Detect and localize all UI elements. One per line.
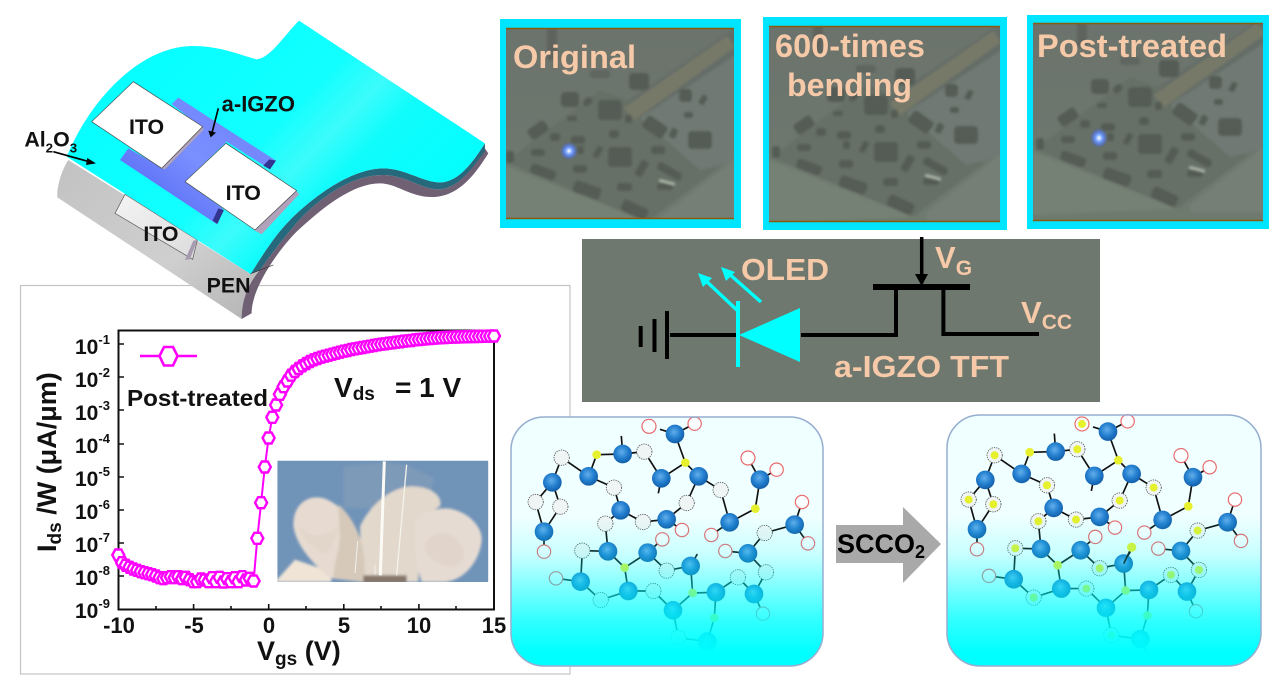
- y axis tick labels: -4: [98, 431, 111, 446]
- photo panel: original: [496, 19, 745, 228]
- circuit labels: V: [935, 240, 956, 275]
- device labels: ITO: [226, 181, 261, 205]
- process arrow: SCCO2: 2: [915, 542, 925, 562]
- photo panel: post-treated: [1026, 15, 1275, 229]
- y axis tick labels: -9: [98, 596, 110, 611]
- y axis title: I: [32, 544, 62, 552]
- x axis title: (V): [297, 636, 341, 666]
- y axis tick labels: 10: [75, 468, 98, 491]
- y axis tick labels: -2: [98, 365, 110, 380]
- panel: transfer curve chart: [20, 286, 570, 674]
- label: Post-treated: [1037, 28, 1227, 64]
- x axis title: V: [257, 636, 275, 666]
- device labels: Al: [24, 128, 46, 152]
- inset photo: bent flexible film held by gloved fingers: [275, 461, 488, 583]
- x axis title: gs: [275, 649, 297, 670]
- lit OLED: [1090, 128, 1108, 148]
- molecular structure: before treatment: [511, 417, 823, 666]
- chart axes: [118, 330, 494, 610]
- circuit labels: a-IGZO TFT: [834, 349, 1009, 384]
- y axis tick labels: 10: [75, 567, 98, 590]
- gate arrow head: [915, 274, 928, 286]
- y axis tick labels: -6: [98, 497, 110, 512]
- x axis tick labels: [103, 613, 506, 638]
- PEN substrate: [57, 160, 260, 319]
- lit OLED: [560, 142, 578, 160]
- arrow to a-IGZO: [208, 108, 218, 137]
- y axis tick labels: -7: [98, 530, 110, 545]
- device labels: a-IGZO: [222, 92, 295, 117]
- x axis tick labels: 10: [407, 613, 431, 638]
- substrate underside: [242, 148, 488, 319]
- molecular structure: after SCCO2 treatment: [947, 415, 1261, 666]
- y axis title: ds: [45, 522, 66, 544]
- arrow to Al2O3: [53, 152, 96, 165]
- circuit labels: V: [1021, 295, 1042, 330]
- ITO source: [92, 82, 204, 169]
- x axis tick labels: 15: [482, 613, 506, 638]
- y axis tick labels: 10: [75, 369, 98, 392]
- Al2O3 edge: [251, 143, 485, 274]
- label: bending: [787, 67, 912, 103]
- TFT and wires: [641, 237, 1039, 359]
- y axis tick labels: -1: [98, 332, 110, 347]
- circuit labels: [741, 240, 1072, 384]
- condition label: ds: [353, 384, 375, 405]
- y axis tick labels: 10: [75, 501, 98, 524]
- label: Original: [513, 39, 636, 75]
- y axis tick labels: 10: [75, 402, 98, 425]
- device labels: [24, 92, 295, 298]
- device labels: 2: [46, 141, 53, 156]
- x axis tick labels: 0: [263, 613, 275, 638]
- condition label: V: [334, 372, 353, 403]
- legend marker: [140, 347, 197, 366]
- photo panel: 600-times bending: [762, 17, 1011, 230]
- circuit labels: CC: [1042, 311, 1072, 334]
- device labels: 3: [70, 141, 77, 156]
- y axis tick labels: -8: [98, 563, 110, 578]
- process arrow: SCCO2: SCCO: [837, 529, 915, 559]
- y axis title: /W (μA/μm): [32, 372, 62, 522]
- y axis tick labels: -3: [98, 398, 110, 413]
- y axis tick labels: 10: [75, 336, 98, 359]
- data curve: post-treated: [118, 336, 494, 582]
- y axis tick labels: [75, 332, 111, 623]
- Al2O3 surface: [67, 21, 485, 274]
- circuit labels: OLED: [741, 252, 829, 287]
- device labels: PEN: [207, 274, 251, 298]
- process arrow: SCCO2: [836, 507, 941, 583]
- x axis tick labels: -10: [103, 613, 135, 638]
- circuit diagram panel: [582, 237, 1100, 402]
- device labels: ITO: [143, 222, 178, 246]
- condition label: = 1 V: [395, 372, 461, 403]
- circuit labels: G: [956, 257, 972, 280]
- device schematic: flexible a-IGZO TFT: [24, 21, 488, 319]
- x axis tick labels: 5: [338, 613, 350, 638]
- label: 600-times: [775, 28, 925, 64]
- y axis tick labels: 10: [75, 435, 98, 458]
- legend label: Post-treated: [127, 385, 268, 411]
- device labels: O: [53, 128, 70, 152]
- y axis tick labels: 10: [75, 534, 98, 557]
- a-IGZO channel: [120, 98, 276, 224]
- y axis tick labels: -5: [98, 464, 110, 479]
- bottom gate ITO: [115, 194, 197, 260]
- OLED symbol: [698, 267, 800, 367]
- x axis tick labels: -5: [184, 613, 204, 638]
- device labels: ITO: [129, 115, 164, 139]
- ITO drain: [185, 143, 299, 234]
- y axis tick labels: 10: [75, 600, 98, 623]
